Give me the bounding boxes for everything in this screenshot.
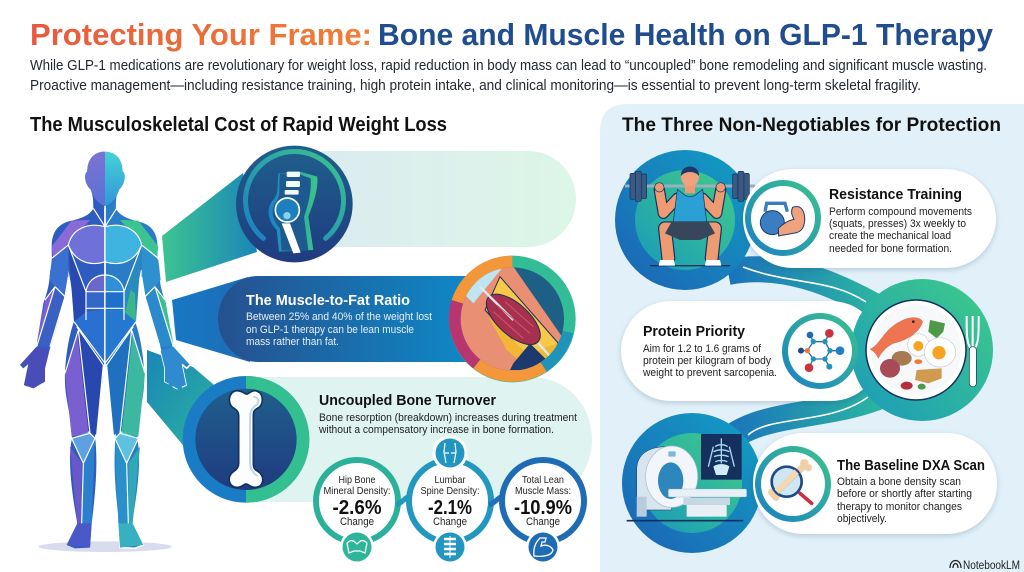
stat: lumbar spine density: Lumbar bbox=[434, 474, 466, 486]
icon: muscle and fat bbox=[449, 256, 576, 382]
icon: magnifier on bone bbox=[755, 446, 831, 522]
icon: spine badge bbox=[433, 530, 467, 564]
heading: Resistance Training bbox=[829, 186, 962, 203]
callout: uncoupled bone turnover bbox=[183, 376, 592, 564]
heading: The Baseline DXA Scan bbox=[837, 457, 985, 474]
icon: knee badge bbox=[432, 436, 468, 470]
stat: lumbar spine density bbox=[409, 436, 491, 564]
pill bbox=[246, 377, 592, 502]
body text: before or shortly after starting bbox=[837, 488, 972, 500]
big circle illustration: scanner bbox=[622, 413, 762, 553]
head bbox=[85, 152, 125, 206]
body text: therapy to monitor changes bbox=[837, 501, 962, 513]
wedge connectors bbox=[147, 173, 257, 450]
body text: protein per kilogram of body bbox=[643, 355, 771, 367]
body text: (squats, presses) 3x weekly to bbox=[829, 218, 966, 230]
stat: hip bone mineral density: Mineral Density: bbox=[324, 485, 390, 497]
big circle illustration: lifter bbox=[615, 150, 755, 290]
body text bbox=[642, 343, 777, 379]
body text: needed for bone formation. bbox=[829, 243, 952, 255]
left half of body bbox=[20, 152, 105, 548]
title: Protecting Your Frame: bbox=[30, 17, 372, 52]
step: resistance training bbox=[615, 150, 996, 290]
pill bbox=[621, 301, 881, 401]
body text: create the mechanical load bbox=[829, 230, 951, 242]
panel: right background bbox=[600, 104, 1024, 572]
callout: top empty pill with hip icon bbox=[236, 146, 576, 262]
stat: lumbar spine density: -2.1% bbox=[428, 497, 472, 519]
icon: bone bbox=[183, 376, 309, 503]
step: baseline dxa scan bbox=[622, 413, 997, 553]
stat: total lean muscle mass bbox=[502, 460, 584, 564]
title: Bone and Muscle Health on GLP-1 Therapy bbox=[378, 17, 994, 52]
body text bbox=[246, 311, 433, 348]
pill bbox=[280, 151, 576, 247]
pill bbox=[753, 433, 997, 534]
stat: hip bone mineral density: -2.6% bbox=[332, 497, 382, 519]
stat: hip bone mineral density bbox=[316, 460, 398, 564]
body text bbox=[837, 476, 972, 525]
stat: total lean muscle mass: Total Lean bbox=[522, 474, 564, 486]
body text: on GLP-1 therapy can be lean muscle bbox=[246, 324, 414, 336]
right heading: The Three Non-Negotiables for Protection bbox=[622, 114, 1001, 136]
icon: flexed arm badge bbox=[526, 530, 560, 564]
big circle illustration: protein plate bbox=[851, 279, 993, 421]
heading: The Muscle-to-Fat Ratio bbox=[246, 293, 410, 309]
body text: Bone resorption (breakdown) increases during treatment bbox=[319, 412, 578, 424]
title bbox=[30, 17, 994, 52]
icon: kettlebell and arm bbox=[745, 180, 821, 256]
body text: Aim for 1.2 to 1.6 grams of bbox=[643, 343, 762, 355]
flow ribbons bbox=[722, 267, 890, 445]
connector: hip to lumbar bbox=[396, 495, 412, 505]
intro paragraph bbox=[30, 58, 987, 94]
icon: hip joint bbox=[236, 146, 353, 262]
body text: Obtain a bone density scan bbox=[837, 476, 961, 488]
pill bbox=[743, 169, 996, 268]
stat: hip bone mineral density: Change bbox=[340, 516, 374, 528]
figure: human body bbox=[20, 152, 190, 552]
body text: mass rather than fat. bbox=[246, 336, 339, 348]
stat: total lean muscle mass: Change bbox=[526, 516, 560, 528]
right half of body bbox=[105, 152, 190, 548]
pill bbox=[218, 276, 470, 362]
body text: objectively. bbox=[837, 513, 887, 525]
left heading: The Musculoskeletal Cost of Rapid Weight Loss bbox=[30, 114, 447, 136]
body text: weight to prevent sarcopenia. bbox=[642, 367, 777, 379]
heading: Uncoupled Bone Turnover bbox=[319, 392, 496, 409]
body text: without a compensatory increase in bone formation. bbox=[318, 424, 554, 436]
stat: lumbar spine density: Change bbox=[433, 516, 467, 528]
icon: molecule bbox=[782, 313, 858, 389]
connector: lumbar to muscle bbox=[489, 495, 505, 505]
body text bbox=[829, 206, 972, 255]
callout: the muscle-to-fat ratio bbox=[218, 256, 576, 382]
step: protein priority bbox=[621, 279, 993, 421]
stat: total lean muscle mass: -10.9% bbox=[514, 497, 572, 519]
icon: pelvis badge bbox=[340, 530, 374, 564]
stat: lumbar spine density: Spine Density: bbox=[420, 485, 480, 497]
intro paragraph: Proactive management—including resistance training, high protein intake, and clinical monitoring—is essential to prevent long-term skeletal fragility. bbox=[30, 78, 921, 94]
heading: Protein Priority bbox=[643, 323, 746, 340]
body text bbox=[318, 412, 578, 436]
body text: Perform compound movements bbox=[829, 206, 972, 218]
stat: total lean muscle mass: Muscle Mass: bbox=[515, 485, 571, 497]
body text: Between 25% and 40% of the weight lost bbox=[246, 311, 433, 323]
stat: hip bone mineral density: Hip Bone bbox=[338, 474, 376, 486]
